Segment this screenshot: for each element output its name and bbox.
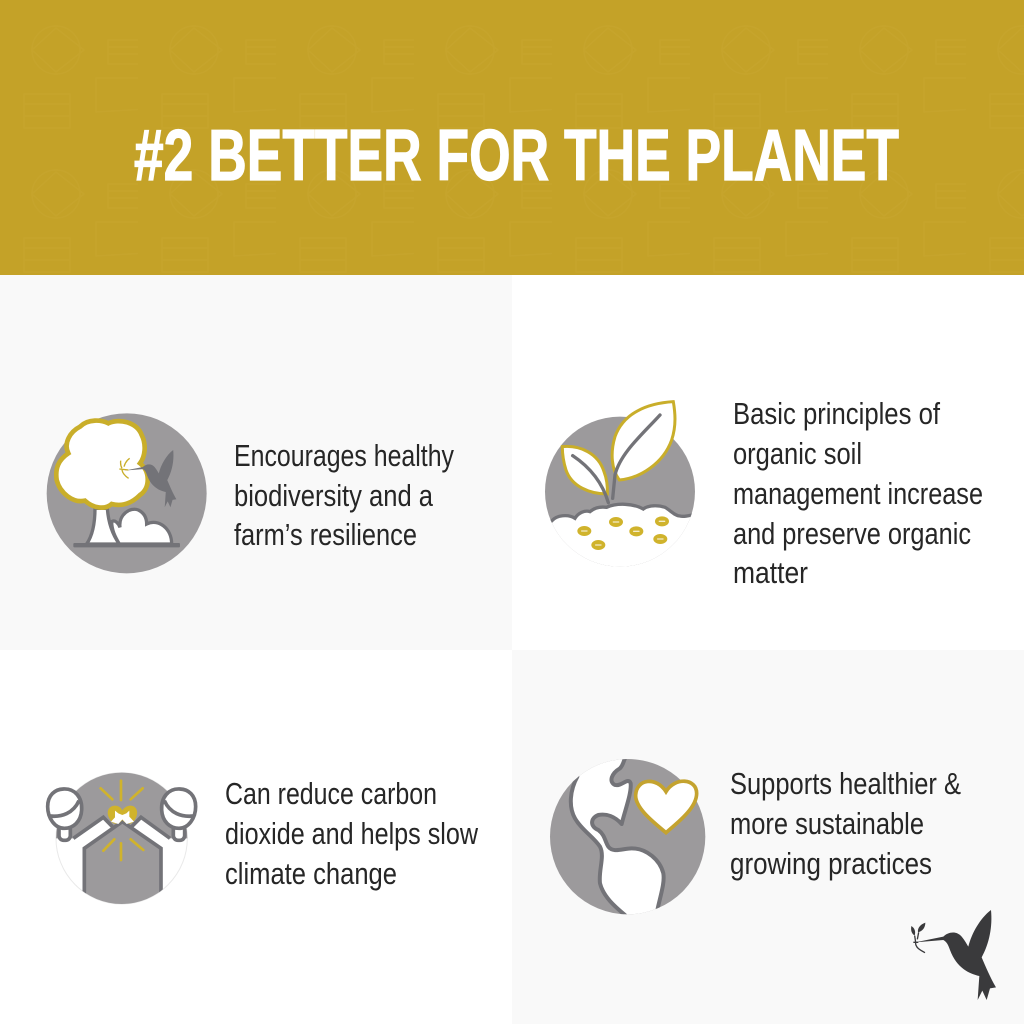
icon: sprout in soil <box>545 400 695 567</box>
text: carbon: dioxide and helps slow <box>225 816 478 851</box>
text: carbon <box>225 776 478 891</box>
text: soil: and preserve organic <box>733 516 971 551</box>
text: growing practices <box>730 766 961 881</box>
icon: globe with heart <box>550 759 706 914</box>
text: biodiversity <box>234 438 454 552</box>
panel: soil <box>545 400 982 584</box>
text: biodiversity: biodiversity and a <box>234 478 434 513</box>
text: growing practices: Supports healthier & <box>730 766 961 801</box>
text: soil <box>733 396 983 590</box>
text: growing practices: more sustainable <box>730 806 924 841</box>
icon: hummingbird logo <box>911 910 996 1000</box>
panel: biodiversity <box>0 275 512 650</box>
icon: house and bulbs <box>48 770 196 907</box>
text: carbon: Can reduce carbon <box>225 776 437 811</box>
panel: growing practices <box>550 759 996 1000</box>
text: biodiversity: Encourages healthy <box>234 438 454 473</box>
panel: carbon <box>46 772 478 904</box>
text: growing practices: growing practices <box>730 846 932 881</box>
icon: tree and hummingbird <box>47 413 207 573</box>
header band <box>0 0 1024 275</box>
text: biodiversity: farm’s resilience <box>234 517 417 552</box>
text: soil: Basic principles of <box>733 396 940 431</box>
text: soil: organic soil <box>733 436 862 471</box>
text: soil: matter <box>733 555 808 590</box>
text: carbon: climate change <box>225 856 397 891</box>
